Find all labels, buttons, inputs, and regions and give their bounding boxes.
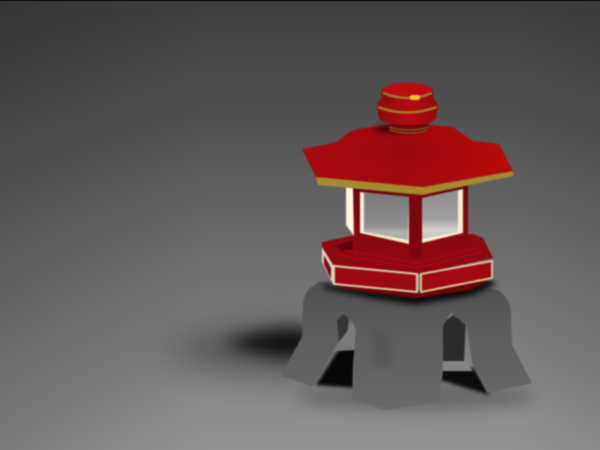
lower drum [377, 100, 438, 125]
shadow under platform [322, 279, 496, 305]
rear right leg [440, 284, 532, 393]
red surface [302, 125, 513, 187]
neck shadow [374, 125, 406, 133]
wall [353, 185, 468, 258]
rear left opening [337, 314, 348, 342]
lit strip [346, 186, 354, 236]
underside [333, 277, 493, 298]
floor between left legs [316, 343, 358, 388]
gold highlight [410, 95, 420, 100]
soft shading on front block [372, 328, 392, 368]
front left panel [334, 266, 417, 292]
right window [422, 189, 463, 243]
roof [302, 125, 513, 195]
step highlights [336, 248, 482, 268]
dome shading [345, 142, 460, 161]
lantern body [346, 185, 468, 258]
left window [360, 192, 409, 244]
gold rim [316, 171, 513, 195]
left facet [322, 247, 333, 284]
stone base [281, 279, 532, 410]
front right panel [421, 261, 492, 292]
cast shadow on floor [160, 325, 533, 409]
rear left leg [281, 282, 362, 387]
floor between right legs [440, 315, 490, 395]
platform top with steps [322, 234, 493, 274]
center pillar [409, 195, 422, 258]
neck [389, 124, 429, 134]
octagonal platform [322, 234, 493, 298]
finial [377, 83, 438, 134]
top drum [381, 83, 434, 104]
dark stepped corner [336, 240, 353, 252]
front stone block [347, 290, 470, 410]
